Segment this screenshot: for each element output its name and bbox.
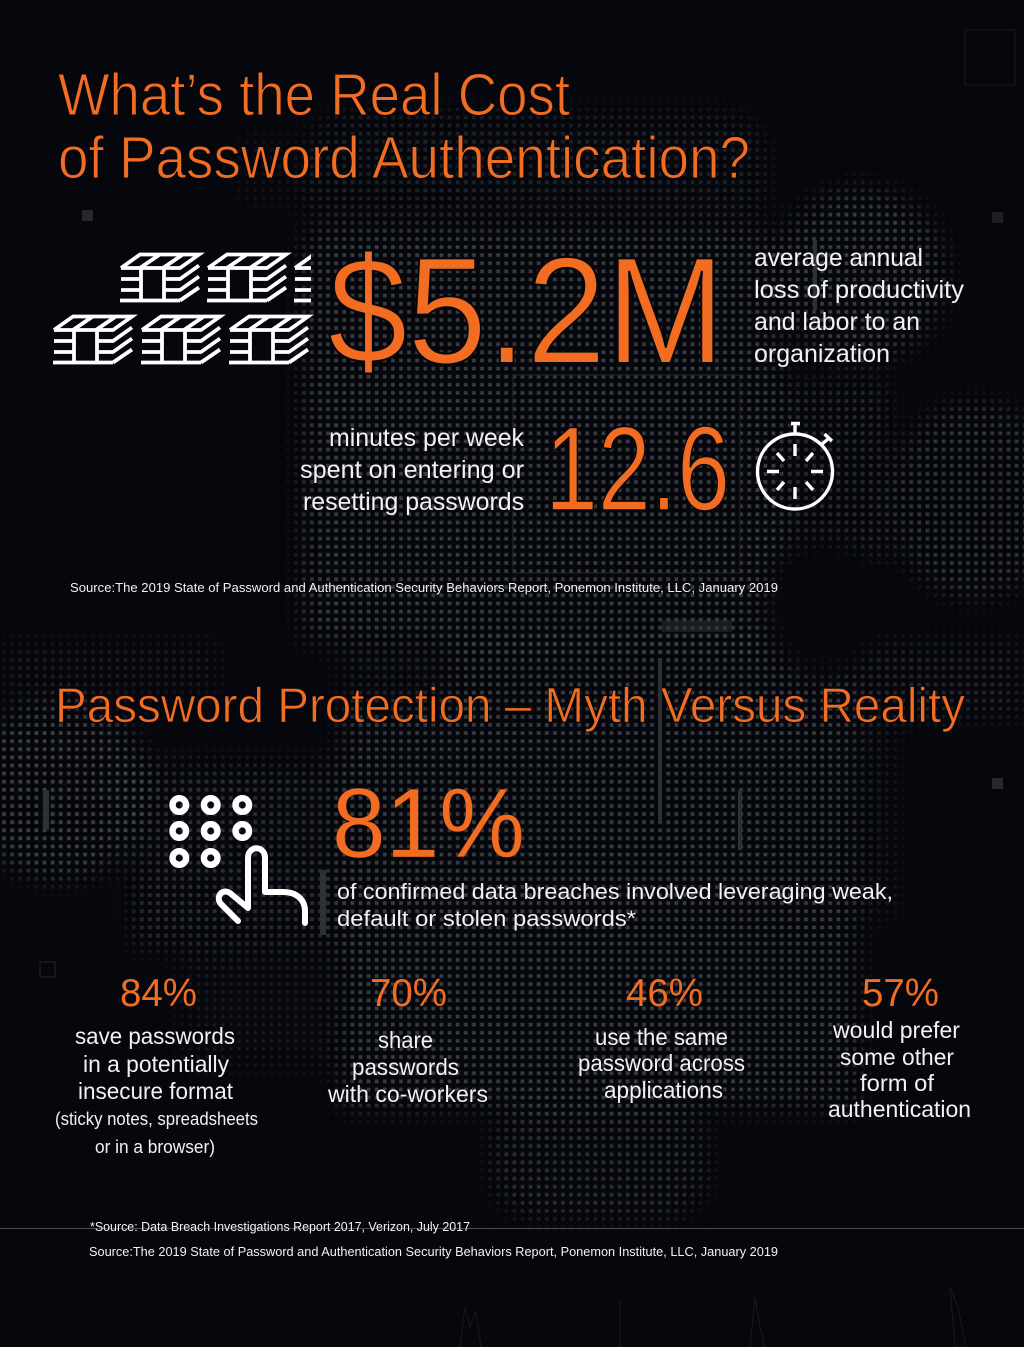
stat column: 57%: [828, 972, 971, 1122]
text: breaches description: default or stolen passwords*: [337, 906, 636, 931]
big stat: 81%: 81%: [332, 768, 525, 878]
text: productivity loss description: average annual: [754, 244, 923, 272]
text: minutes description: spent on entering or: [300, 456, 524, 484]
stat column: 84%: (sticky notes, spreadsheets: [55, 1109, 258, 1129]
icon: stacks of money: [53, 252, 314, 364]
stat column: 84%: save passwords: [75, 1023, 235, 1049]
big stat: 12.6: 12.6: [545, 402, 730, 536]
text: productivity loss description: and labor to an: [754, 308, 920, 336]
heading: myth versus reality: Password Protection – Myth Versus Reality: [55, 679, 965, 733]
icon: stopwatch: [758, 424, 832, 509]
stat column: 57%: form of: [860, 1070, 935, 1096]
stat column: 46%: use the same: [595, 1024, 728, 1050]
title: of Password Authentication?: [58, 125, 750, 191]
footer sources: *Source: Data Breach Investigations Report 2017, Verizon, July 2017: [90, 1219, 470, 1234]
stat column: 84%: or in a browser): [95, 1137, 215, 1157]
stat column: 70%: passwords: [352, 1054, 459, 1080]
text: productivity loss description: loss of productivity: [754, 276, 965, 304]
stat column: 46%: [578, 972, 745, 1103]
stat column: 57%: some other: [840, 1044, 954, 1070]
stat column: 57%: authentication: [828, 1096, 971, 1122]
text: productivity loss description: organization: [754, 340, 890, 368]
stat column: 70%: share: [378, 1027, 433, 1053]
source note 1: Source:The 2019 State of Password and Authentication Security Behaviors Report, Ponemon Institute, LLC, January 2019: [70, 580, 778, 595]
stat column: 84%: 84%: [120, 972, 197, 1015]
title: [58, 62, 750, 191]
stat column: 46%: applications: [604, 1077, 723, 1103]
text: breaches description: [337, 879, 893, 931]
icon: keypad and finger: [172, 798, 305, 923]
stat column: 57%: would prefer: [832, 1017, 960, 1043]
stat column: 57%: 57%: [862, 972, 939, 1015]
text: minutes description: minutes per week: [329, 424, 524, 452]
stat column: 84%: in a potentially: [83, 1051, 229, 1077]
text: minutes description: resetting passwords: [303, 488, 524, 516]
stat column: 46%: 46%: [626, 972, 703, 1015]
footer sources: [89, 1219, 778, 1259]
text: breaches description: of confirmed data breaches involved leveraging weak,: [337, 879, 893, 904]
text: productivity loss description: [754, 244, 965, 368]
stat column: 70%: 70%: [370, 972, 447, 1015]
title: What’s the Real Cost: [58, 62, 570, 128]
stat column: 46%: password across: [578, 1050, 745, 1076]
stat column: 70%: [327, 972, 488, 1107]
stat column: 84%: [55, 972, 258, 1157]
stat column: 70%: with co-workers: [327, 1081, 488, 1107]
footer sources: Source:The 2019 State of Password and Authentication Security Behaviors Report, Ponemon Institute, LLC, January 2019: [89, 1244, 778, 1259]
big stat: $5.2M: $5.2M: [328, 226, 725, 396]
stat column: 84%: insecure format: [78, 1078, 234, 1104]
text: minutes description: [300, 424, 524, 516]
